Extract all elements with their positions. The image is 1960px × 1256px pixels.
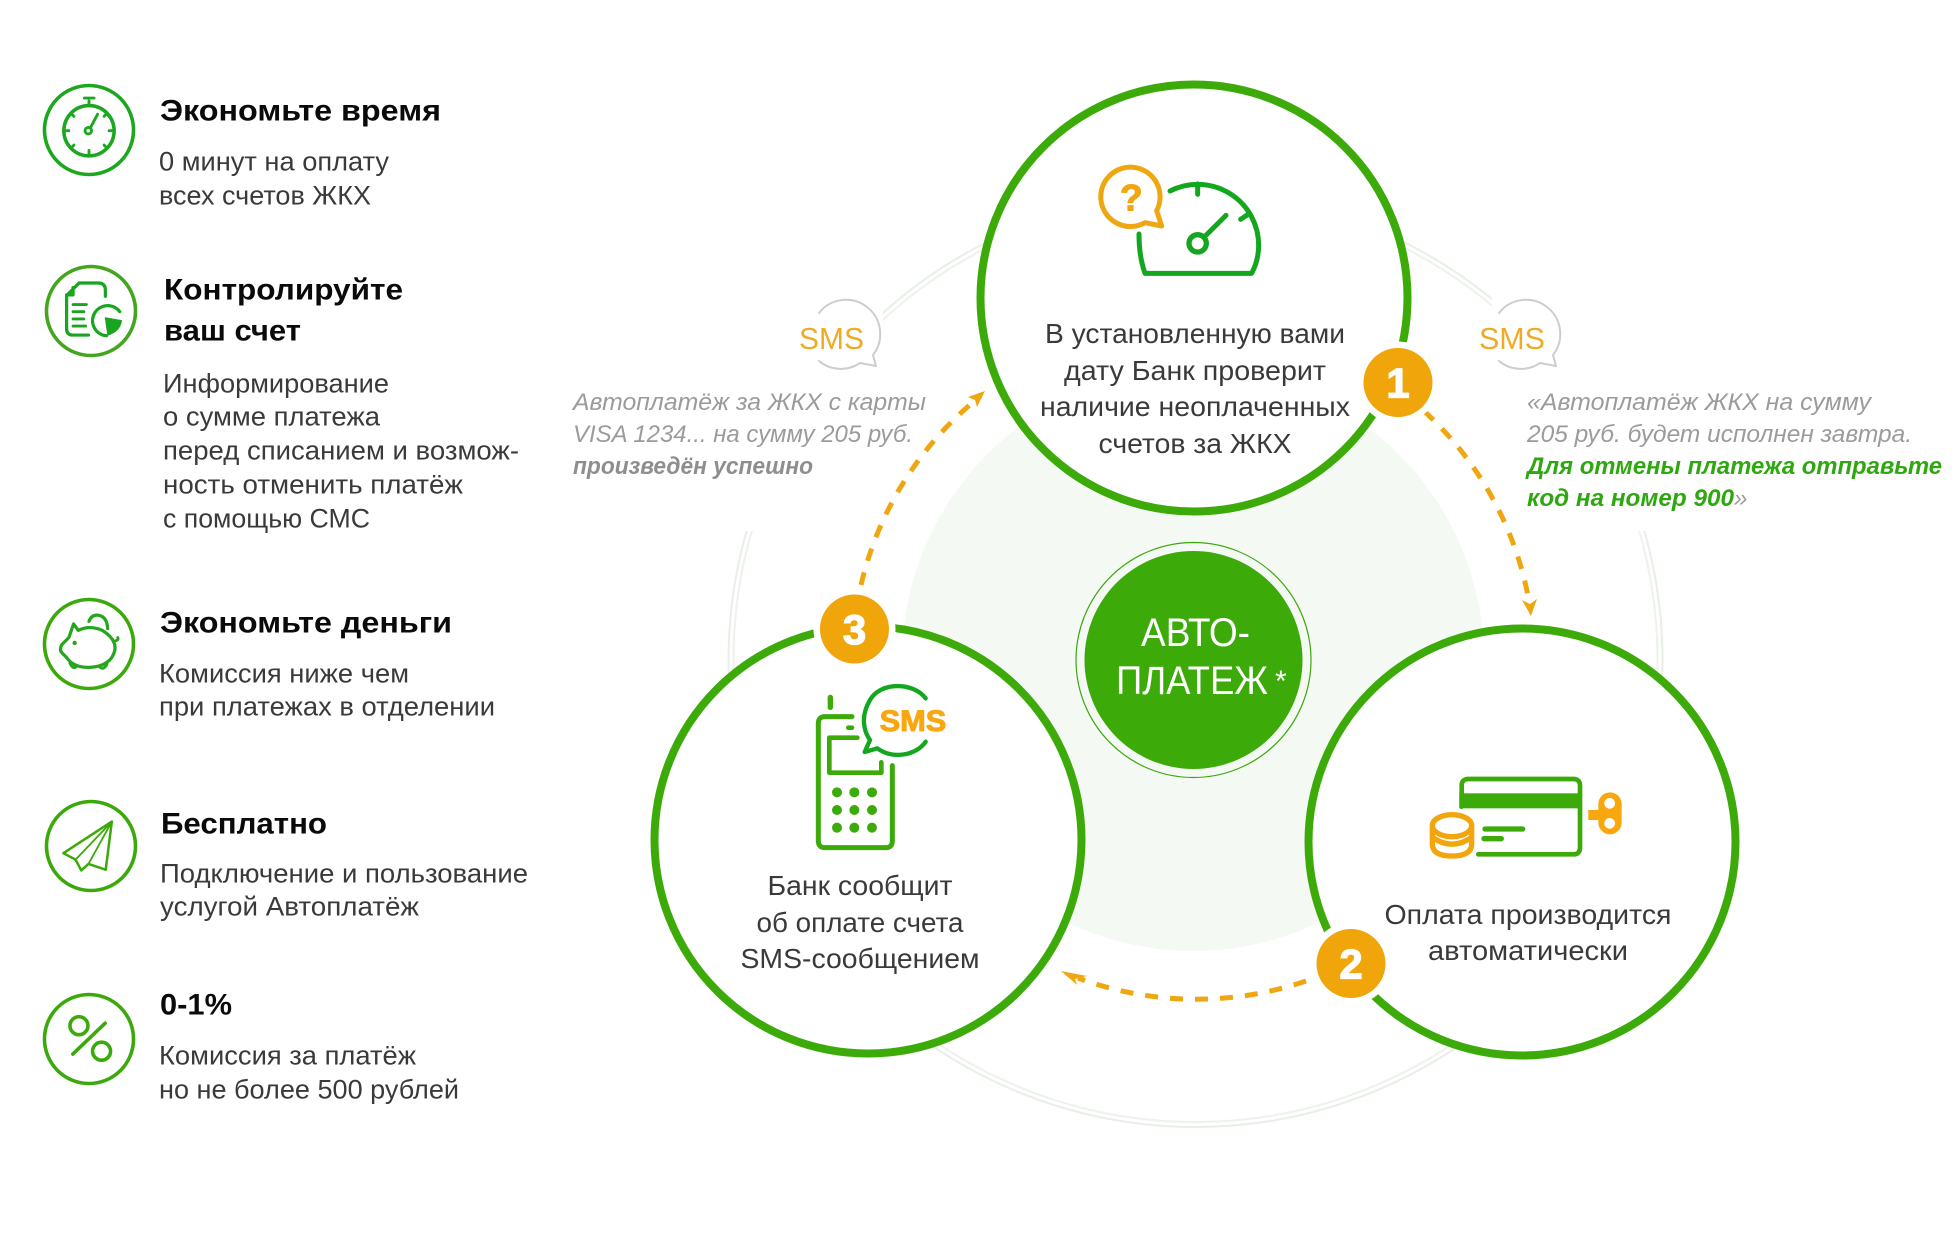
panel: process cycle diagram [571,84,1942,1127]
text: control detail: перед списанием и возмож- [163,436,519,466]
text: control detail: Информирование [163,368,389,398]
text: free detail: Подключение и пользование [160,858,528,888]
heading: save money: Экономьте деньги [160,606,452,640]
text: save time detail: всех счетов ЖКХ [159,180,371,210]
arrow: step 3 to step 1 [861,391,985,585]
central badge: autopayment: АВТО- [1141,611,1250,655]
text: save money detail: при платежах в отделении [159,692,495,722]
heading: control your account [164,274,403,348]
text: reminder message [1525,389,1942,512]
badge: number 1 [1357,342,1439,424]
text: step 2 description [1384,899,1672,966]
icon: bank card with coins and key [1432,779,1622,856]
text: step 1 description [1040,318,1350,459]
step 2 circle [1308,628,1736,1056]
benefit: commission percent [44,988,459,1104]
text: free detail [160,858,528,922]
text: step 1 description: В установленную вами [1045,318,1345,349]
heading: free: Бесплатно [161,808,327,840]
text: step 2 description: Оплата производится [1384,899,1672,930]
text: reminder message: 205 руб. будет исполнен завтра. [1526,421,1912,448]
text: save money detail: Комиссия ниже чем [159,658,409,688]
text: step 2 description: автоматически [1428,935,1628,966]
icon: percent [44,994,134,1084]
text: step 1 description: наличие неоплаченных [1040,391,1350,422]
icon: paper plane [46,801,136,891]
icon: phone with SMS bubble: SMS [880,705,946,738]
text: control detail: ность отменить платёж [163,470,463,500]
central badge: autopayment: ПЛАТЕЖ [1116,659,1268,703]
text: control detail [163,368,519,534]
text: step 3 description: Банк сообщит [768,870,953,901]
icon: phone with SMS bubble [818,686,946,848]
icon: piggy bank [44,599,134,689]
badge: number 1: 1 [1386,360,1410,406]
central badge: autopayment [1076,542,1311,778]
text: reminder message: код на номер 900 [1527,485,1735,512]
heading: control your account: Контролируйте [164,274,403,306]
icon: gauge with question bubble: ? [1120,177,1143,219]
icon: gauge with question bubble [1101,167,1259,273]
badge: number 3: 3 [843,606,866,653]
text: commission detail: но не более 500 рублей [159,1074,459,1104]
text: reminder message: » [1734,485,1747,512]
text: reminder message: Для отмены платежа отправьте [1525,453,1942,480]
icon: SMS bubble left: SMS [799,321,864,356]
arrow: step 2 to step 3 [1061,971,1306,999]
step 3 circle [654,588,1082,1054]
text: control detail: о сумме платежа [163,402,381,432]
icon: stopwatch [44,85,134,175]
icon: SMS bubble right [1479,300,1560,369]
arrow: step 1 to step 2 [1424,411,1537,616]
badge: number 2 [1310,922,1392,1004]
text: save time detail [159,146,389,210]
icon: SMS bubble left [799,300,880,369]
icon: document with chart [46,266,136,356]
pale centre disc [902,369,1484,951]
benefit: free [46,801,528,922]
text: control detail: с помощью СМС [163,504,370,534]
text: confirmation message: Автоплатёж за ЖКХ с карты [571,389,926,416]
badge: number 2: 2 [1339,940,1363,988]
badge: number 3 [814,588,896,670]
callout: reminder SMS [1479,300,1942,512]
benefit: save money [44,599,495,722]
callout: confirmation SMS [571,300,926,480]
icon: SMS bubble right: SMS [1479,321,1545,356]
text: confirmation message: VISA 1234... на сумму 205 руб. [573,421,913,448]
text: commission detail: Комиссия за платёж [159,1040,416,1070]
text: step 3 description: SMS-сообщением [740,943,980,974]
text: step 1 description: счетов за ЖКХ [1098,428,1292,459]
text: confirmation message [571,389,926,480]
panel: benefit list [44,85,528,1104]
text: reminder message: «Автоплатёж ЖКХ на сумму [1527,389,1873,416]
heading: control your account: ваш счет [164,314,301,348]
text: step 3 description: об оплате счета [756,907,964,938]
text: save time detail: 0 минут на оплату [159,146,389,176]
text: confirmation message: произведён успешно [573,453,813,480]
text: free detail: услугой Автоплатёж [160,892,419,922]
heading: commission percent: 0-1% [160,988,232,1022]
benefit: save time [44,85,441,210]
step 1 circle [980,84,1439,512]
text: step 3 description [740,870,980,974]
central badge: autopayment: * [1275,665,1287,698]
text: commission detail [159,1040,459,1104]
benefit: control your account [46,266,519,534]
text: step 1 description: дату Банк проверит [1064,355,1326,386]
heading: save time: Экономьте время [160,94,441,128]
text: save money detail [159,658,495,722]
